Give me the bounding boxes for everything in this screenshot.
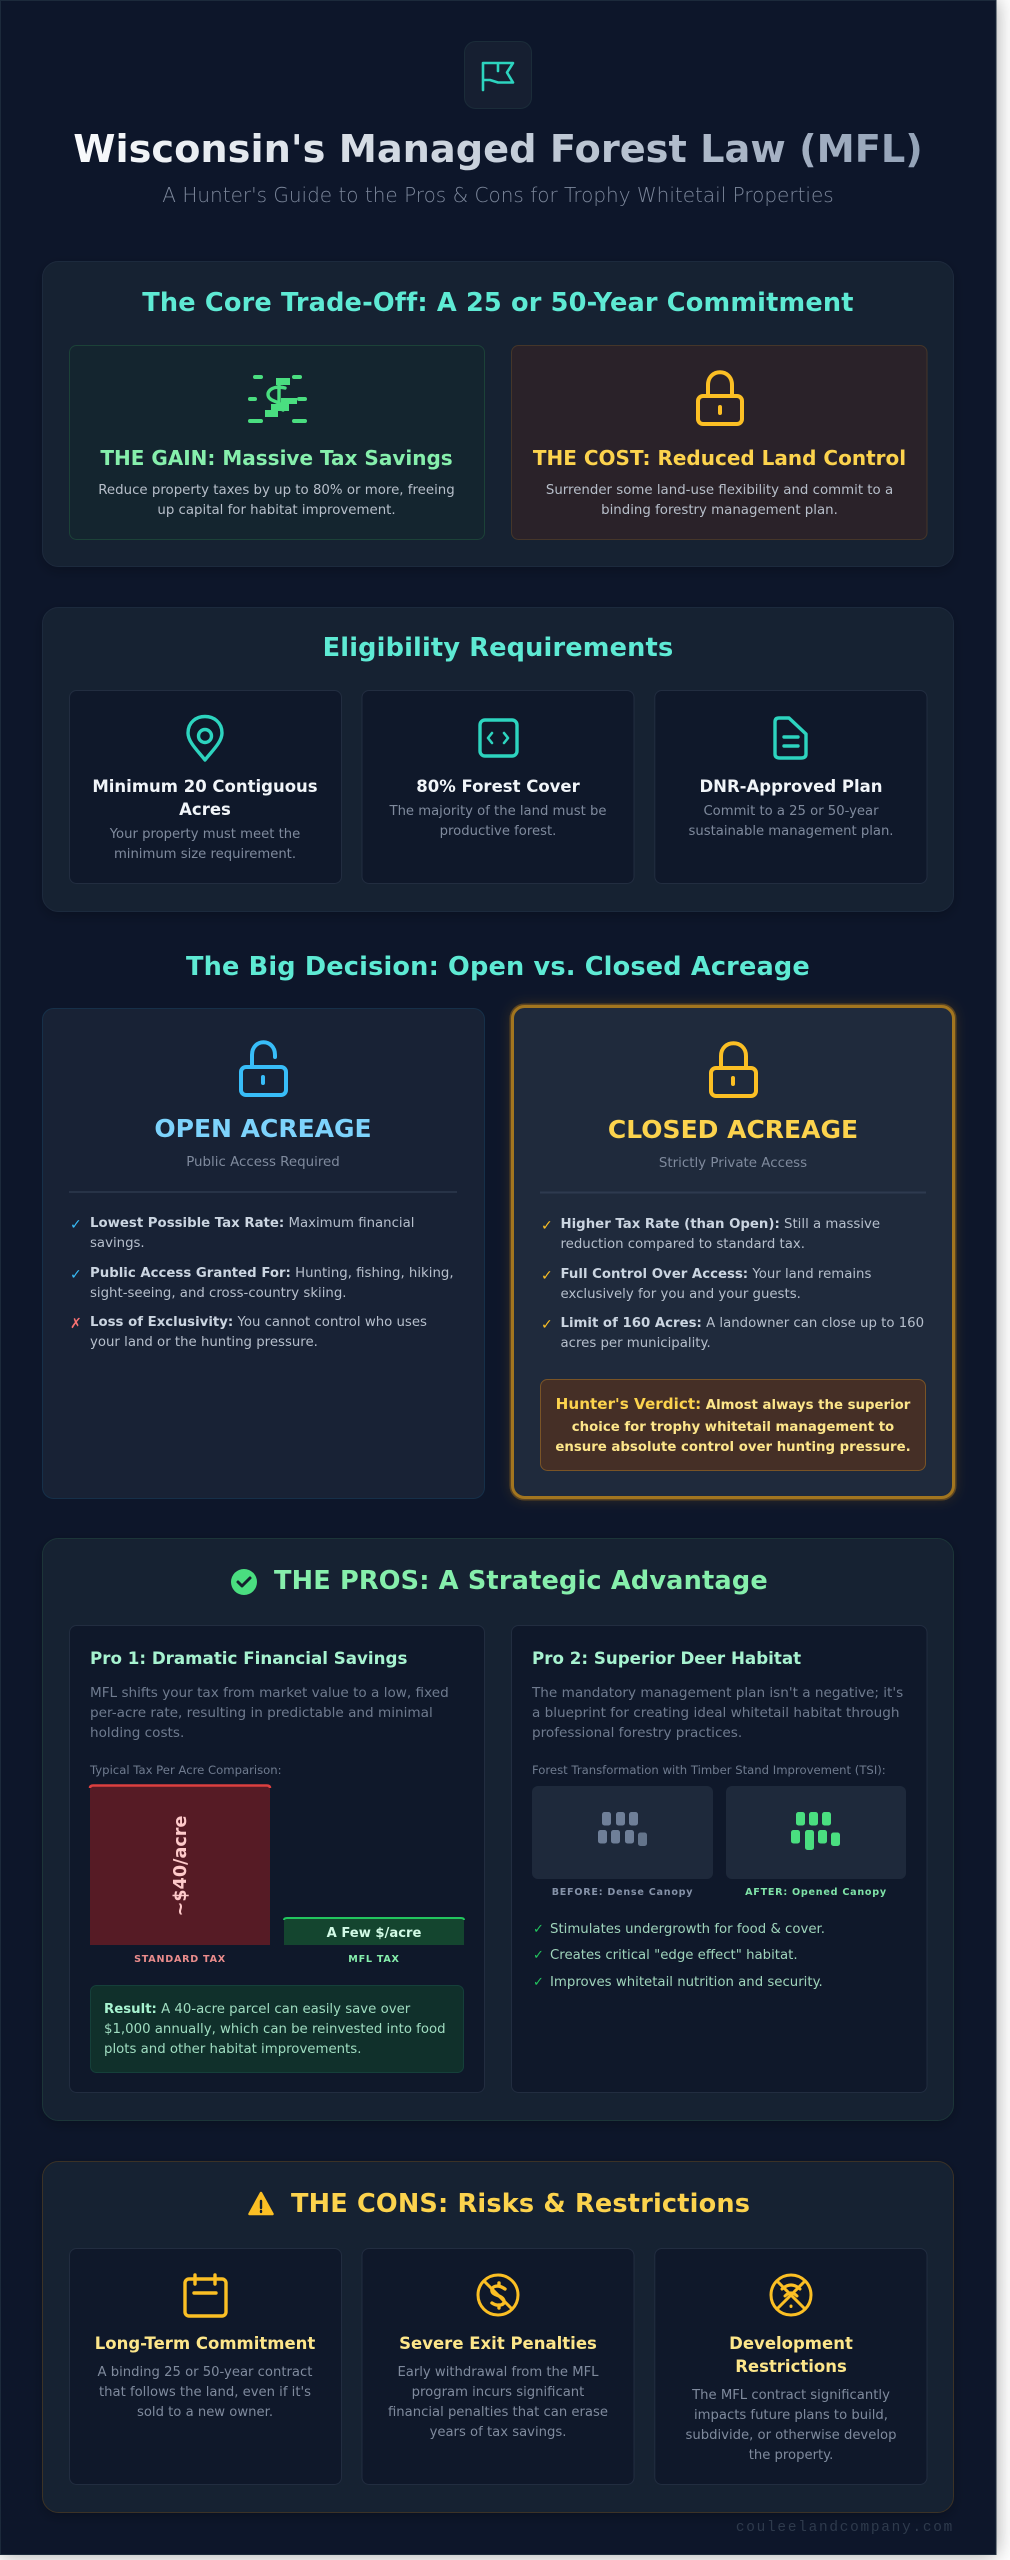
card text xyxy=(546,483,893,518)
bar: standard tax xyxy=(90,1786,270,1965)
benefits list: sight-seeing, and cross-country skiing. xyxy=(90,1286,347,1301)
card text: Surrender some land-use flexibility and commit to a xyxy=(546,483,893,498)
card title: DNR-Approved Plan xyxy=(699,777,883,796)
benefits list: ✗ xyxy=(70,1316,82,1332)
benefits list: ✓ xyxy=(533,1975,544,1990)
card text: The MFL contract significantly xyxy=(691,2388,890,2403)
card text xyxy=(90,1685,449,1741)
card text: a blueprint for creating ideal whitetail habitat through xyxy=(532,1705,899,1721)
card: pro 2 xyxy=(512,1626,927,2092)
benefits list: ✓ xyxy=(533,1922,544,1937)
benefits list: your land or the hunting pressure. xyxy=(90,1335,318,1350)
card text: subdivide, or otherwise develop xyxy=(686,2428,896,2443)
bar: mfl tax: MFL TAX xyxy=(348,1954,400,1965)
bar: standard tax: ~$40/acre xyxy=(171,1816,191,1916)
card text: The majority of the land must be xyxy=(389,804,606,819)
card text: Commit to a 25 or 50-year xyxy=(703,804,879,819)
card text: The mandatory management plan isn't a negative; it's xyxy=(531,1685,903,1701)
card text: holding costs. xyxy=(90,1725,184,1741)
benefits list xyxy=(533,1922,825,1990)
card text: binding forestry management plan. xyxy=(601,503,838,518)
card: minimum acres xyxy=(70,690,342,884)
icon: lock xyxy=(698,372,742,424)
card title: Development xyxy=(729,2334,853,2353)
title: open acreage: OPEN ACREAGE xyxy=(154,1114,372,1143)
bar chart: tax comparison xyxy=(90,1786,464,1965)
after panel: opened canopy: AFTER: Opened Canopy xyxy=(745,1887,887,1898)
benefits list xyxy=(541,1217,924,1351)
card text: per-acre rate, resulting in predictable and minimal xyxy=(90,1705,433,1721)
callout: result: plots and other habitat improvements. xyxy=(104,2042,361,2057)
card title: THE GAIN: Massive Tax Savings xyxy=(100,446,453,470)
before panel: dense canopy: BEFORE: Dense Canopy xyxy=(552,1887,693,1898)
heading: big decision: The Big Decision: Open vs. Closed Acreage xyxy=(186,952,810,982)
heading: the pros: THE PROS: A Strategic Advantage xyxy=(274,1566,768,1596)
panel: the pros xyxy=(42,1538,954,2120)
icon: check circle xyxy=(231,1569,257,1595)
card text: minimum size requirement. xyxy=(114,847,296,862)
benefits list: Full Control Over Access: Your land remains xyxy=(560,1267,871,1282)
panel: core trade-off xyxy=(42,262,954,566)
panel: eligibility xyxy=(42,608,954,912)
card title: Pro 2: Superior Deer Habitat xyxy=(532,1648,801,1668)
benefits list: reduction compared to standard tax. xyxy=(560,1237,805,1252)
card: the cost xyxy=(512,346,927,540)
benefits list: Lowest Possible Tax Rate: Maximum financial xyxy=(90,1216,414,1231)
benefits list: Loss of Exclusivity: You cannot control who uses xyxy=(90,1315,427,1330)
title: Wisconsin's Managed Forest Law (MFL) xyxy=(73,127,923,172)
icon: closed lock xyxy=(711,1043,756,1096)
icon: code square xyxy=(480,720,517,756)
subtitle: Public Access Required xyxy=(186,1155,340,1170)
benefits list: exclusively for you and your guests. xyxy=(560,1287,801,1302)
card text: years of tax savings. xyxy=(430,2425,566,2440)
callout: hunter's verdict: Hunter's Verdict: Almost always the superior xyxy=(556,1395,911,1413)
card: development restrictions xyxy=(655,2248,927,2484)
chart label: Forest Transformation with Timber Stand Improvement (TSI): xyxy=(532,1763,886,1777)
card title: THE COST: Reduced Land Control xyxy=(533,446,906,470)
title: closed acreage: CLOSED ACREAGE xyxy=(608,1115,858,1144)
card text xyxy=(98,483,455,518)
bar: mfl tax xyxy=(284,1918,464,1965)
icon: flag xyxy=(464,42,532,108)
after panel: opened canopy xyxy=(726,1786,906,1898)
benefits list: ✓ xyxy=(70,1267,82,1283)
card text: Early withdrawal from the MFL xyxy=(397,2365,599,2380)
card title: 80% Forest Cover xyxy=(416,777,581,796)
icon: dense trees xyxy=(598,1812,647,1846)
benefits list: Limit of 160 Acres: A landowner can close up to 160 xyxy=(560,1316,924,1331)
panel: closed acreage xyxy=(512,1006,954,1498)
card title: Long-Term Commitment xyxy=(95,2334,315,2353)
callout: hunter's verdict: ensure absolute control over hunting pressure. xyxy=(555,1440,911,1455)
callout: hunter's verdict xyxy=(540,1380,926,1470)
benefits list: ✓ xyxy=(70,1217,82,1233)
card text: professional forestry practices. xyxy=(532,1725,742,1741)
before panel: dense canopy xyxy=(532,1786,713,1898)
card text: up capital for habitat improvement. xyxy=(157,503,396,518)
icon: calendar xyxy=(185,2275,226,2316)
card text: that follows the land, even if it's xyxy=(99,2385,311,2400)
heading: the cons: THE CONS: Risks & Restrictions xyxy=(291,2189,750,2219)
callout: result: Result: A 40-acre parcel can easily save over xyxy=(104,2002,411,2017)
bar: standard tax: STANDARD TAX xyxy=(134,1954,226,1965)
card text: program incurs significant xyxy=(412,2385,584,2400)
callout: result xyxy=(90,1986,464,2072)
icon: dollar savings xyxy=(250,377,305,421)
card: approved plan xyxy=(655,690,927,884)
header xyxy=(73,42,923,207)
card text xyxy=(388,2365,608,2440)
footer: source: couleelandcompany.com xyxy=(736,2520,954,2536)
subtitle: A Hunter's Guide to the Pros & Cons for Trophy Whitetail Properties xyxy=(162,183,834,207)
chart label: Typical Tax Per Acre Comparison: xyxy=(89,1763,282,1777)
heading: core trade-off: The Core Trade-Off: A 25 or 50-Year Commitment xyxy=(142,288,854,318)
benefits list: Higher Tax Rate (than Open): Still a massive xyxy=(560,1217,880,1232)
icon: no signal xyxy=(771,2275,811,2315)
card: minimum acres: Acres xyxy=(179,800,231,819)
benefits list: Creates critical "edge effect" habitat. xyxy=(550,1948,798,1963)
heading: eligibility: Eligibility Requirements xyxy=(323,633,673,663)
icon: open lock xyxy=(241,1042,286,1095)
card text: sustainable management plan. xyxy=(688,824,894,839)
icon: opened trees xyxy=(791,1812,840,1850)
card title: Minimum 20 Contiguous xyxy=(92,777,318,796)
card text xyxy=(531,1685,903,1741)
card text xyxy=(389,804,606,839)
callout: hunter's verdict: choice for trophy whitetail management to xyxy=(572,1420,894,1435)
card text: MFL shifts your tax from market value to a low, fixed xyxy=(90,1685,449,1701)
card title: Pro 1: Dramatic Financial Savings xyxy=(90,1648,407,1668)
card text xyxy=(98,2365,312,2420)
card: long-term commitment xyxy=(70,2248,342,2484)
subtitle: Strictly Private Access xyxy=(659,1156,807,1171)
panel: open acreage xyxy=(42,1008,484,1498)
card text: financial penalties that can erase xyxy=(388,2405,608,2420)
card text: A binding 25 or 50-year contract xyxy=(98,2365,312,2380)
card text xyxy=(686,2388,896,2463)
icon: location pin xyxy=(188,716,222,760)
card text xyxy=(109,827,300,862)
icon: warning xyxy=(250,2193,272,2214)
card text xyxy=(688,804,894,839)
benefits list: ✓ xyxy=(533,1948,544,1963)
bar: mfl tax: A Few $/acre xyxy=(327,1926,421,1941)
card text: the property. xyxy=(749,2448,833,2463)
card: pro 1 xyxy=(70,1626,484,2092)
benefits list: acres per municipality. xyxy=(560,1336,711,1351)
benefits list: Improves whitetail nutrition and security. xyxy=(550,1975,823,1990)
benefits list: ✓ xyxy=(541,1317,553,1333)
callout: result: $1,000 annually, which can be reinvested into food xyxy=(104,2022,446,2037)
benefits list: ✓ xyxy=(541,1218,553,1234)
benefits list: savings. xyxy=(90,1236,145,1251)
benefits list: Public Access Granted For: Hunting, fishing, hiking, xyxy=(90,1266,454,1281)
panel: the cons xyxy=(42,2162,954,2512)
card text: Reduce property taxes by up to 80% or more, freeing xyxy=(98,483,455,498)
benefits list: Stimulates undergrowth for food & cover. xyxy=(550,1922,825,1937)
card text: Your property must meet the xyxy=(109,827,300,842)
benefits list xyxy=(70,1216,454,1350)
card text: impacts future plans to build, xyxy=(694,2408,888,2423)
benefits list: ✓ xyxy=(541,1268,553,1284)
card: exit penalties xyxy=(362,2248,634,2484)
card title: Severe Exit Penalties xyxy=(399,2334,597,2353)
icon: no dollar xyxy=(478,2275,518,2315)
card text: sold to a new owner. xyxy=(137,2405,273,2420)
icon: document xyxy=(775,718,806,758)
card: development restrictions: Restrictions xyxy=(735,2357,847,2376)
card: the gain xyxy=(70,346,484,540)
card: forest cover xyxy=(362,690,634,884)
card text: productive forest. xyxy=(440,824,556,839)
